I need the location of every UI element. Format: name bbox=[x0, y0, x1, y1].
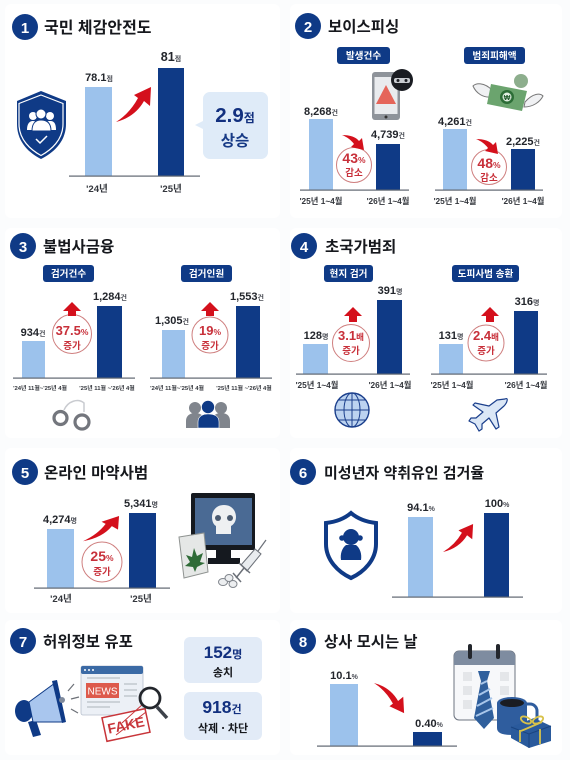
icon: phone warning with thief bbox=[372, 69, 413, 120]
bar chart: 검거인원: 1,305건 bbox=[155, 315, 189, 327]
callout: 2.4배 증가: 2.4배 bbox=[473, 328, 499, 343]
icon: airplane bbox=[469, 399, 507, 431]
bar chart 8 bbox=[317, 670, 457, 747]
bar chart 6 bbox=[392, 498, 523, 598]
icon: megaphone bbox=[15, 680, 79, 737]
panel 4: 초국가범죄 bbox=[290, 228, 562, 438]
stat: 918건 삭제·차단 bbox=[184, 692, 262, 740]
stat: 152명 송치 bbox=[184, 637, 262, 683]
bar chart: 현지 검거 bbox=[296, 285, 411, 390]
badge 7 bbox=[10, 628, 36, 654]
panel 1: 국민 체감안전도 bbox=[5, 4, 280, 218]
icon: flying money bbox=[473, 74, 543, 111]
callout: 3.1배 증가: 3.1배 bbox=[338, 328, 364, 343]
label: 도피사범 송환: 도피사범 송환 bbox=[458, 266, 513, 280]
bar chart 1: 81점 bbox=[161, 50, 181, 64]
icon: drug pouch bbox=[179, 533, 208, 578]
bar chart 5: 5,341명 bbox=[124, 498, 158, 510]
panel 8: 상사 모시는 날 bbox=[290, 620, 562, 755]
badge 1: 1 bbox=[21, 20, 29, 37]
callout: 2.4배 증가: 증가 bbox=[477, 343, 495, 357]
badge 8: 8 bbox=[299, 634, 307, 651]
icon: necktie bbox=[474, 671, 494, 729]
bar chart: 검거인원: '25년 11월 ~'26년 4월 bbox=[216, 384, 272, 392]
icon: gift box bbox=[511, 715, 551, 748]
bar chart: 발생건수 bbox=[300, 106, 409, 206]
bar chart: 도피사범 송환: 316명 bbox=[515, 296, 539, 308]
arrow: up bbox=[116, 87, 151, 122]
label: 검거건수 bbox=[43, 265, 94, 282]
stat: 918건 삭제·차단: 918건 bbox=[202, 697, 242, 717]
bar chart: 발생건수: 4,739건 bbox=[371, 129, 405, 141]
bar chart 1: '25년 bbox=[160, 183, 182, 195]
callout: 37.5% 증가: 증가 bbox=[63, 338, 81, 352]
heading 1: 국민 체감안전도 bbox=[44, 14, 152, 38]
callout: 43% 감소: 43% bbox=[342, 150, 366, 166]
label: 현지 검거: 현지 검거 bbox=[330, 266, 368, 280]
bar chart 1: '24년 bbox=[86, 183, 108, 195]
callout: 25% 증가: 25% bbox=[90, 548, 114, 564]
bar chart: 검거건수: '24년 11월~'25년 4월 bbox=[13, 384, 67, 392]
arrow: down bbox=[374, 683, 404, 713]
bar chart 1 bbox=[69, 50, 200, 195]
badge 8 bbox=[290, 628, 316, 654]
badge 7: 7 bbox=[19, 634, 27, 651]
icon: flying money: ₩ bbox=[504, 95, 511, 102]
icon: fake stamp bbox=[102, 709, 150, 741]
bar chart: 범죄피해액: 2,225건 bbox=[506, 136, 540, 148]
arrow: up bbox=[83, 516, 119, 541]
stat: 918건 삭제·차단: 삭제 · 차단 bbox=[198, 720, 248, 736]
heading 3: 불법사금융 bbox=[43, 235, 114, 257]
bar chart 8: 0.40% bbox=[415, 718, 444, 730]
bar chart: 도피사범 송환: '26년 1~4월 bbox=[505, 380, 547, 390]
badge 3: 3 bbox=[19, 239, 27, 256]
icon: coffee mug bbox=[497, 697, 537, 735]
panel 2: 보이스피싱 bbox=[290, 4, 562, 218]
badge 1 bbox=[12, 14, 38, 40]
panel 3: 불법사금융 bbox=[5, 228, 280, 438]
bar chart: 도피사범 송환 bbox=[431, 296, 547, 390]
callout: 2.9점 상승: 2.9점 bbox=[215, 104, 255, 127]
stat: 152명 송치: 송치 bbox=[213, 664, 233, 680]
callout: 37.5% 증가 bbox=[52, 302, 92, 354]
icon: globe bbox=[335, 393, 369, 427]
badge 6: 6 bbox=[299, 465, 307, 482]
label: 현지 검거 bbox=[324, 265, 373, 282]
heading 4: 초국가범죄 bbox=[325, 235, 396, 257]
bar chart: 검거인원: 1,553건 bbox=[230, 291, 264, 303]
badge 5: 5 bbox=[21, 465, 29, 482]
bar chart 5: 4,274명 bbox=[43, 514, 77, 526]
bar chart: 검거인원 bbox=[150, 291, 272, 392]
icon: shield with child bbox=[326, 513, 376, 578]
label: 범죄피해액: 범죄피해액 bbox=[472, 48, 517, 62]
icon: fake stamp: FAKE bbox=[106, 713, 146, 737]
bar chart: 발생건수: '25년 1~4월 bbox=[300, 196, 342, 206]
callout: 3.1배 증가 bbox=[332, 307, 370, 362]
bar chart: 검거건수: 1,284건 bbox=[93, 291, 127, 303]
callout: 48% 감소: 감소 bbox=[480, 170, 498, 184]
arrow: up bbox=[443, 524, 473, 552]
icon: magnifier bbox=[116, 688, 167, 735]
heading 2: 보이스피싱 bbox=[328, 15, 399, 37]
icon: news browser bbox=[81, 666, 143, 715]
icon: shield with people bbox=[17, 91, 66, 159]
icon: people bbox=[186, 400, 230, 428]
callout: 19% 증가 bbox=[192, 302, 228, 353]
bar chart: 발생건수: 8,268건 bbox=[304, 106, 338, 118]
badge 4 bbox=[291, 233, 317, 259]
label: 범죄피해액 bbox=[464, 47, 525, 64]
stat: 152명 송치: 152명 bbox=[204, 643, 242, 662]
callout: 3.1배 증가: 증가 bbox=[342, 343, 360, 357]
label: 발생건수: 발생건수 bbox=[346, 48, 381, 62]
bar chart: 검거인원: '24년 11월~'25년 4월 bbox=[150, 384, 204, 392]
bar chart: 도피사범 송환: 131명 bbox=[439, 330, 463, 342]
label: 도피사범 송환 bbox=[452, 265, 519, 282]
heading 8: 상사 모시는 날 bbox=[324, 630, 418, 652]
bar chart: 현지 검거: 391명 bbox=[378, 285, 402, 297]
callout: 2.4배 증가 bbox=[468, 307, 504, 361]
badge 2: 2 bbox=[304, 19, 312, 36]
callout: 25% 증가: 증가 bbox=[93, 564, 111, 578]
icon: pills bbox=[218, 574, 237, 588]
icon: calendar bbox=[454, 644, 515, 720]
bar chart 5: '25년 bbox=[130, 593, 152, 605]
badge 4: 4 bbox=[300, 239, 309, 256]
callout: 2.9점 상승: 상승 bbox=[221, 129, 249, 151]
label: 발생건수 bbox=[337, 47, 390, 64]
bar chart: 범죄피해액: 4,261건 bbox=[438, 116, 472, 128]
bar chart: 범죄피해액 bbox=[434, 116, 544, 206]
bar chart: 검거건수: '25년 11월 ~'26년 4월 bbox=[79, 384, 135, 392]
callout: 19% 증가: 증가 bbox=[201, 338, 219, 352]
panel 5: 온라인 마약사범 bbox=[5, 448, 280, 613]
bar chart: 범죄피해액: '25년 1~4월 bbox=[434, 196, 476, 206]
bar chart: 현지 검거: '25년 1~4월 bbox=[296, 380, 338, 390]
panel 7: 허위정보 유포 bbox=[5, 620, 280, 755]
callout: 2.9점 상승 bbox=[195, 92, 268, 159]
bar chart 8: 10.1% bbox=[330, 670, 359, 682]
badge 6 bbox=[290, 459, 316, 485]
label: 검거인원: 검거인원 bbox=[189, 266, 224, 280]
bar chart: 현지 검거: '26년 1~4월 bbox=[369, 380, 411, 390]
badge 5 bbox=[12, 459, 38, 485]
heading 6: 미성년자 약취유인 검거율 bbox=[324, 462, 484, 483]
callout: 48% 감소 bbox=[472, 139, 506, 184]
label: 검거인원 bbox=[181, 265, 232, 282]
icon: syringe bbox=[233, 540, 266, 582]
callout: 19% 증가: 19% bbox=[199, 323, 221, 338]
bar chart 6: 100% bbox=[485, 498, 510, 510]
badge 3 bbox=[10, 233, 36, 259]
callout: 43% 감소: 감소 bbox=[345, 165, 363, 179]
icon: news browser: NEWS bbox=[88, 686, 118, 698]
bar chart: 현지 검거: 128명 bbox=[304, 330, 328, 342]
bar chart: 도피사범 송환: '25년 1~4월 bbox=[431, 380, 473, 390]
panel 6: 미성년자 약취유인 검거율 bbox=[290, 448, 562, 613]
label: 검거건수: 검거건수 bbox=[51, 266, 86, 280]
bar chart 1: 78.1점 bbox=[85, 72, 113, 84]
bar chart 5: '24년 bbox=[50, 593, 72, 605]
callout: 25% 증가 bbox=[82, 542, 122, 582]
callout: 37.5% 증가: 37.5% bbox=[56, 323, 89, 338]
icon: handcuffs bbox=[54, 401, 89, 429]
heading 5: 온라인 마약사범 bbox=[44, 461, 148, 483]
callout: 48% 감소: 48% bbox=[477, 155, 501, 171]
bar chart: 검거건수: 934건 bbox=[21, 327, 45, 339]
bar chart: 발생건수: '26년 1~4월 bbox=[367, 196, 409, 206]
badge 2 bbox=[295, 13, 321, 39]
callout: 43% 감소 bbox=[336, 135, 372, 182]
icon: monitor with skull bbox=[191, 493, 255, 564]
heading 7: 허위정보 유포 bbox=[43, 630, 133, 652]
bar chart: 검거건수 bbox=[13, 291, 135, 392]
bar chart 6: 94.1% bbox=[407, 502, 436, 514]
bar chart 5 bbox=[34, 498, 170, 605]
bar chart: 범죄피해액: '26년 1~4월 bbox=[502, 196, 544, 206]
